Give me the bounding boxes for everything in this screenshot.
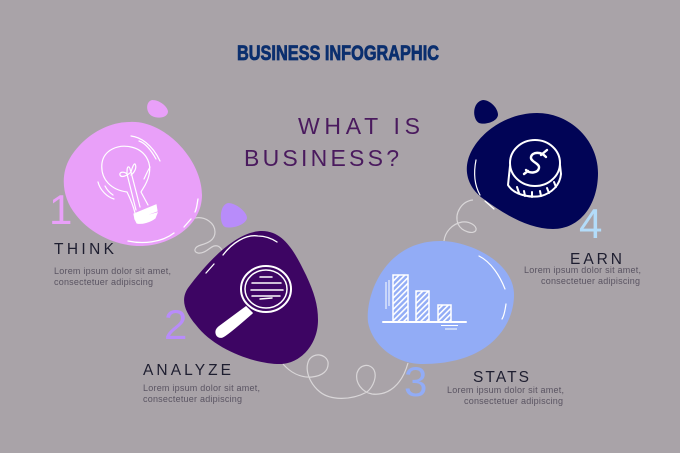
- blob: pink: [64, 122, 202, 246]
- description: think: Lorem ipsum dolor sit amet,: [54, 266, 171, 276]
- description: think: consectetuer adipiscing: [54, 277, 153, 287]
- blob: small pink: [147, 100, 168, 118]
- heading: what is business: [244, 113, 420, 171]
- connector: pink to purple: [195, 218, 222, 253]
- blob: dark purple: [184, 231, 318, 364]
- title: BUSINESS INFOGRAPHIC: [237, 42, 439, 65]
- description: earn: Lorem ipsum dolor sit amet,: [524, 265, 641, 275]
- description: earn: [524, 265, 641, 286]
- panel: stats: [368, 241, 564, 406]
- panel: earn: [467, 100, 641, 286]
- highlight strokes: [479, 256, 506, 319]
- connector: blue to navy: [444, 200, 476, 241]
- heading: what is business: BUSINESS?: [244, 145, 399, 171]
- connector: purple to blue: [283, 355, 408, 398]
- description: analyze: Lorem ipsum dolor sit amet,: [143, 383, 260, 393]
- blob: small navy: [474, 100, 498, 124]
- highlight strokes: [128, 199, 198, 242]
- number 2: 2: [164, 301, 187, 348]
- icon: bar chart: [383, 275, 466, 329]
- highlight strokes: [475, 160, 494, 209]
- icon: light bulb: [98, 136, 160, 223]
- label: think: THINK: [54, 241, 115, 258]
- description: analyze: consectetuer adipiscing: [143, 394, 242, 404]
- heading: what is business: WHAT IS: [298, 113, 420, 139]
- label: stats: STATS: [473, 369, 529, 386]
- blob: blue: [368, 241, 514, 364]
- description: analyze: [143, 383, 260, 404]
- panel: analyze: [143, 203, 318, 404]
- number 4: 4: [579, 200, 602, 247]
- icon: coin: [508, 140, 561, 197]
- highlight strokes: [206, 236, 277, 273]
- description: earn: consectetuer adipiscing: [541, 276, 640, 286]
- description: stats: consectetuer adipiscing: [464, 396, 563, 406]
- description: stats: [447, 385, 564, 406]
- number 3: 3: [404, 358, 427, 405]
- label: analyze: ANALYZE: [143, 362, 231, 379]
- number 1: 1: [49, 186, 72, 233]
- panel: think: [49, 100, 202, 287]
- label: earn: EARN: [570, 251, 622, 268]
- icon: magnifying glass: [216, 266, 291, 337]
- description: think: [54, 266, 171, 287]
- description: stats: Lorem ipsum dolor sit amet,: [447, 385, 564, 395]
- blob: small lilac: [221, 203, 247, 228]
- blob: navy: [467, 113, 598, 229]
